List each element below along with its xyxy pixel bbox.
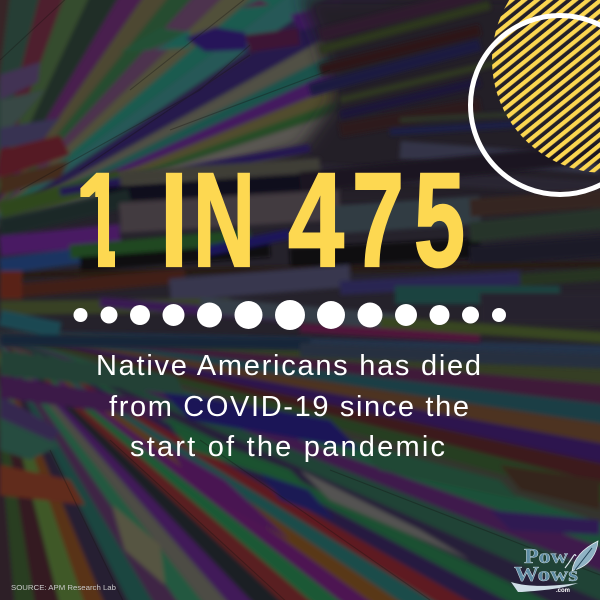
statement text: Native Americans has died <box>96 350 481 382</box>
logo wordmark: Wows <box>514 562 578 586</box>
logo wordmark: Pow <box>524 544 569 568</box>
logo .com: .com <box>556 588 570 594</box>
logo: PowWows.com <box>511 541 598 594</box>
headline: 1 IN 475: 4 <box>288 146 344 295</box>
hatched yellow disk <box>492 0 600 173</box>
headline: 1 IN 475: I <box>160 146 188 295</box>
left edge details <box>0 62 40 100</box>
headline: 1 IN 475: 7 <box>352 146 404 295</box>
upper right dark area <box>270 0 394 164</box>
logo swoosh <box>511 582 578 592</box>
statement text <box>96 350 481 463</box>
logo wordmark <box>514 544 578 586</box>
upper fan wedges <box>0 0 340 225</box>
dotted divider <box>74 300 506 330</box>
white ring <box>470 16 600 194</box>
feather tips <box>120 28 190 52</box>
statement text: start of the pandemic <box>130 431 445 463</box>
source note: SOURCE: APM Research Lab <box>11 583 116 592</box>
lower fan wedges <box>0 330 600 600</box>
central horizontal band <box>0 148 600 362</box>
headline: 1 IN 475: N <box>193 146 255 295</box>
headline: 1 IN 475: 5 <box>414 146 465 295</box>
icon: feather <box>565 541 598 571</box>
lower left details <box>0 465 85 505</box>
statement text: from COVID-19 since the <box>109 391 469 423</box>
headline: 1 IN 475: 1 <box>75 146 125 295</box>
headline: 1 IN 475 <box>80 172 464 268</box>
